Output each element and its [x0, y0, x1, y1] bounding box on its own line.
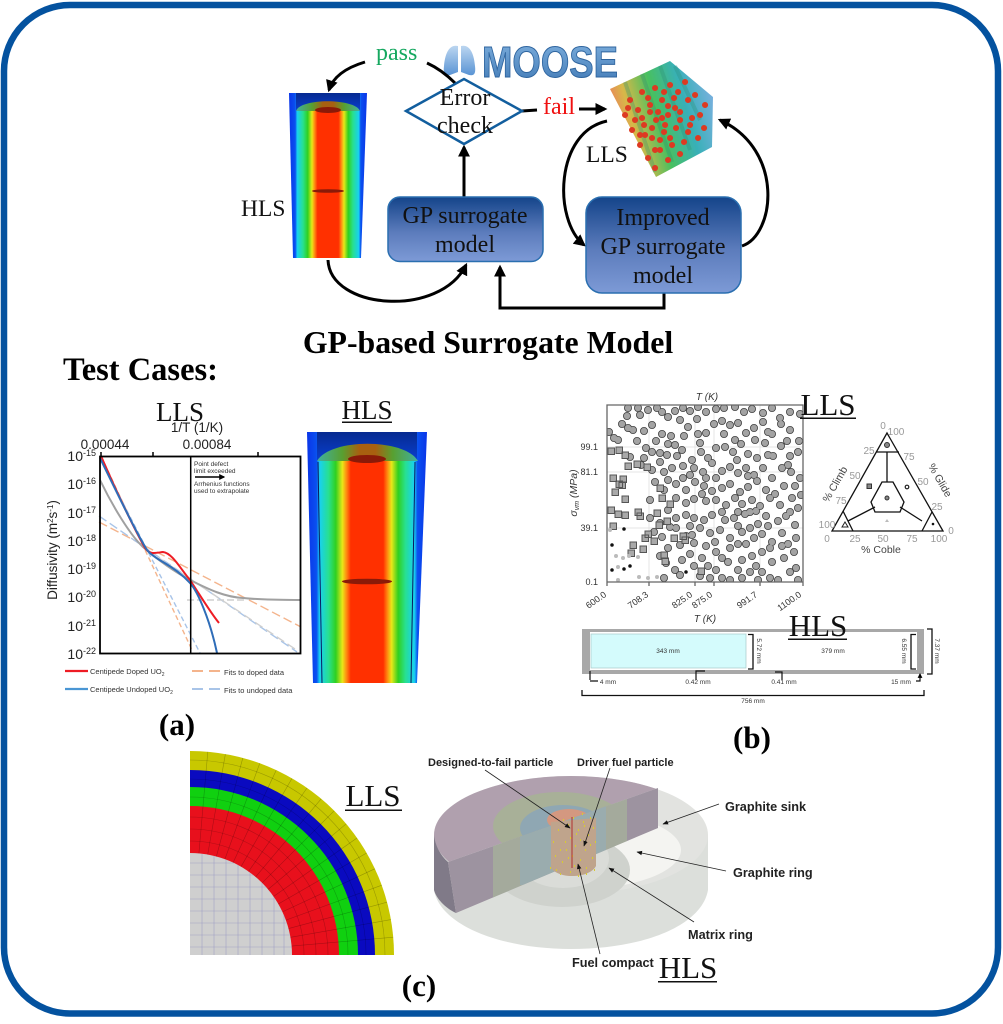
legend: 2 [170, 690, 173, 696]
ternary diagram: 50 [877, 534, 889, 545]
fuel rod schematic: 756 mm [741, 698, 765, 705]
fuel rod schematic: 5.72 mm [755, 638, 762, 664]
annotation: point defect limit [194, 461, 250, 495]
y tick labels: -19 [83, 561, 96, 571]
x ticks: 600.0 [584, 589, 608, 611]
y ticks [580, 442, 598, 587]
y axis title: -1 [46, 504, 55, 512]
annotation: point defect limit: Arrhenius functions [194, 481, 250, 488]
HLS simulation: fuel rod temperature map [289, 93, 367, 258]
ternary diagram: 75 [903, 452, 915, 463]
fuel rod schematic: 379 mm [821, 648, 845, 655]
HLS label panel b: HLS [789, 608, 847, 643]
callout: Driver fuel particle: Driver fuel particle [577, 757, 674, 769]
workflow arrows [328, 62, 768, 308]
fuel rod schematic: 343 mm [656, 648, 680, 655]
LLS particle mesh: quarter disk [190, 751, 394, 955]
LLS simulation: microstructure cube [610, 61, 713, 177]
ternary diagram: % Climb [820, 464, 850, 504]
y axis label: vm [574, 501, 581, 510]
callout: Driver fuel particle [577, 757, 674, 846]
annotation: point defect limit: used to extrapolate [194, 488, 250, 495]
y axis title: ) [45, 500, 60, 505]
HLS compact: cutaway cylinder [434, 776, 708, 949]
LLS label panel b: LLS [800, 387, 856, 422]
ternary diagram: 50 [849, 471, 861, 482]
y tick labels: -17 [83, 505, 96, 515]
legend: Centipede Undoped UO [90, 685, 170, 694]
callout: Graphite ring: Graphite ring [733, 866, 813, 880]
callout: Graphite sink [663, 800, 807, 824]
deformation mechanism map [568, 392, 803, 625]
LLS label panel c: LLS [345, 778, 401, 813]
legend: 2 [162, 672, 165, 678]
decision: Error check: check [437, 113, 493, 139]
MOOSE logo [444, 38, 618, 87]
y tick labels: 10 [67, 589, 83, 605]
fuel rod schematic: 6.55 mm [900, 638, 907, 664]
y axis title: s [45, 511, 60, 518]
callout: Fuel compact: Fuel compact [572, 956, 655, 970]
y axis title: 2 [46, 518, 55, 523]
HLS label panel a: HLS [341, 395, 393, 425]
fit lines [99, 456, 301, 653]
legend: Centipede Doped UO [90, 667, 162, 676]
fuel rod schematic: 15 mm [891, 679, 911, 686]
LLS label: LLS [586, 142, 628, 168]
y axis label: σ [568, 510, 580, 517]
y tick labels [67, 448, 96, 662]
y ticks: 0.1 [585, 577, 598, 587]
ternary diagram: 25 [863, 446, 875, 457]
small markers [612, 529, 686, 572]
panel label b: (b) [733, 720, 771, 755]
x ticks: 708.3 [626, 589, 650, 611]
y tick labels: -20 [83, 589, 96, 599]
x ticks: 1100.0 [775, 589, 803, 613]
box: Improved GP surrogate model: model [633, 263, 693, 289]
ternary diagram: 25 [931, 502, 943, 513]
y tick labels: -22 [83, 646, 96, 656]
ternary diagram: 100 [931, 534, 948, 545]
panel label c: (c) [402, 968, 436, 1003]
ternary diagram: 100 [819, 520, 836, 531]
square markers [608, 447, 704, 574]
fuel rod schematic: 7.37 mm [933, 638, 940, 664]
legend: Fits to doped data [224, 668, 285, 677]
plot frame and ticks [100, 456, 300, 654]
y ticks: 81.1 [580, 467, 598, 477]
HLS label panel c: HLS [659, 950, 717, 985]
diffusivity chart [45, 420, 301, 696]
diffusivity chart: 0.00044 [81, 437, 130, 452]
box: GP surrogate model [388, 197, 543, 262]
ternary diagram: 0 [880, 421, 886, 432]
heading: Test Cases: Test Cases: [63, 352, 218, 388]
x ticks [584, 589, 803, 613]
callout: Matrix ring: Matrix ring [688, 928, 753, 942]
callout: Graphite ring [637, 852, 813, 880]
ternary diagram: % Glide [925, 462, 954, 500]
y tick labels: 10 [67, 448, 83, 464]
fuel rod schematic: 0.41 mm [771, 679, 797, 686]
box: Improved GP surrogate model [586, 197, 741, 293]
y tick labels: 10 [67, 618, 83, 634]
ternary diagram: 100 [888, 427, 905, 438]
box: Improved GP surrogate model: GP surrogate [600, 234, 726, 260]
data curves [100, 480, 301, 600]
ternary diagram: 0 [948, 526, 954, 537]
y tick labels: -18 [83, 533, 96, 543]
x axis title: 1/T (1/K) [171, 420, 223, 435]
legend: Fits to undoped data [224, 686, 293, 695]
deformation mechanism map: T (K) [696, 392, 718, 403]
box: GP surrogate model: GP surrogate [402, 203, 528, 229]
decision: Error check [406, 79, 522, 144]
x ticks: 825.0 [670, 589, 694, 611]
ternary diagram: % Coble [861, 544, 901, 556]
ternary diagram: 50 [917, 477, 929, 488]
y axis title: Diffusivity (m [45, 523, 60, 600]
panel label a: (a) [159, 707, 195, 742]
y tick labels: -16 [83, 476, 96, 486]
callout: Graphite sink: Graphite sink [725, 800, 807, 814]
callout: Matrix ring [609, 868, 753, 942]
y ticks: 39.1 [580, 523, 598, 533]
plot frame [607, 405, 803, 586]
fuel rod schematic: 4 mm [600, 679, 616, 686]
HLS label: HLS [241, 196, 285, 222]
y tick labels: 10 [67, 561, 83, 577]
ternary diagram: 75 [906, 534, 918, 545]
legend [65, 667, 293, 696]
x ticks: 875.0 [690, 589, 714, 611]
callout: Designed-to-fail particle [428, 757, 570, 828]
y tick labels: 10 [67, 476, 83, 492]
ternary diagram: 25 [849, 534, 861, 545]
y axis label: (MPa) [568, 469, 580, 501]
y tick labels: 10 [67, 505, 83, 521]
fail label: fail [543, 94, 575, 120]
ternary diagram: 0 [824, 534, 830, 545]
HLS temperature map panel a [307, 432, 427, 683]
y ticks: 99.1 [580, 442, 598, 452]
box: Improved GP surrogate model: Improved [616, 205, 710, 231]
callout: Designed-to-fail particle: Designed-to-fail particle [428, 757, 553, 769]
MOOSE logo: MOOSE [482, 38, 618, 87]
box: GP surrogate model: model [435, 232, 495, 258]
y tick labels: 10 [67, 646, 83, 662]
y tick labels: 10 [67, 533, 83, 549]
annotation: point defect limit: Point defect [194, 461, 229, 468]
x ticks: 991.7 [735, 589, 759, 611]
title: GP-based Surrogate Model [303, 325, 673, 360]
ternary diagram: 75 [835, 496, 847, 507]
pass label: pass [376, 40, 417, 66]
annotation: point defect limit: limit exceeded [194, 468, 236, 475]
fuel rod schematic [582, 629, 940, 705]
LLS label panel a: LLS [156, 397, 204, 427]
ternary diagram [819, 421, 954, 556]
x axis label: T (K) [694, 614, 716, 625]
y tick labels: -15 [83, 448, 96, 458]
decision: Error check: Error [440, 85, 490, 111]
callout: Fuel compact [572, 864, 655, 970]
fuel rod schematic: 0.42 mm [685, 679, 711, 686]
y tick labels: -21 [83, 618, 96, 628]
circle markers [609, 407, 801, 580]
diffusivity chart: 0.00084 [183, 437, 232, 452]
